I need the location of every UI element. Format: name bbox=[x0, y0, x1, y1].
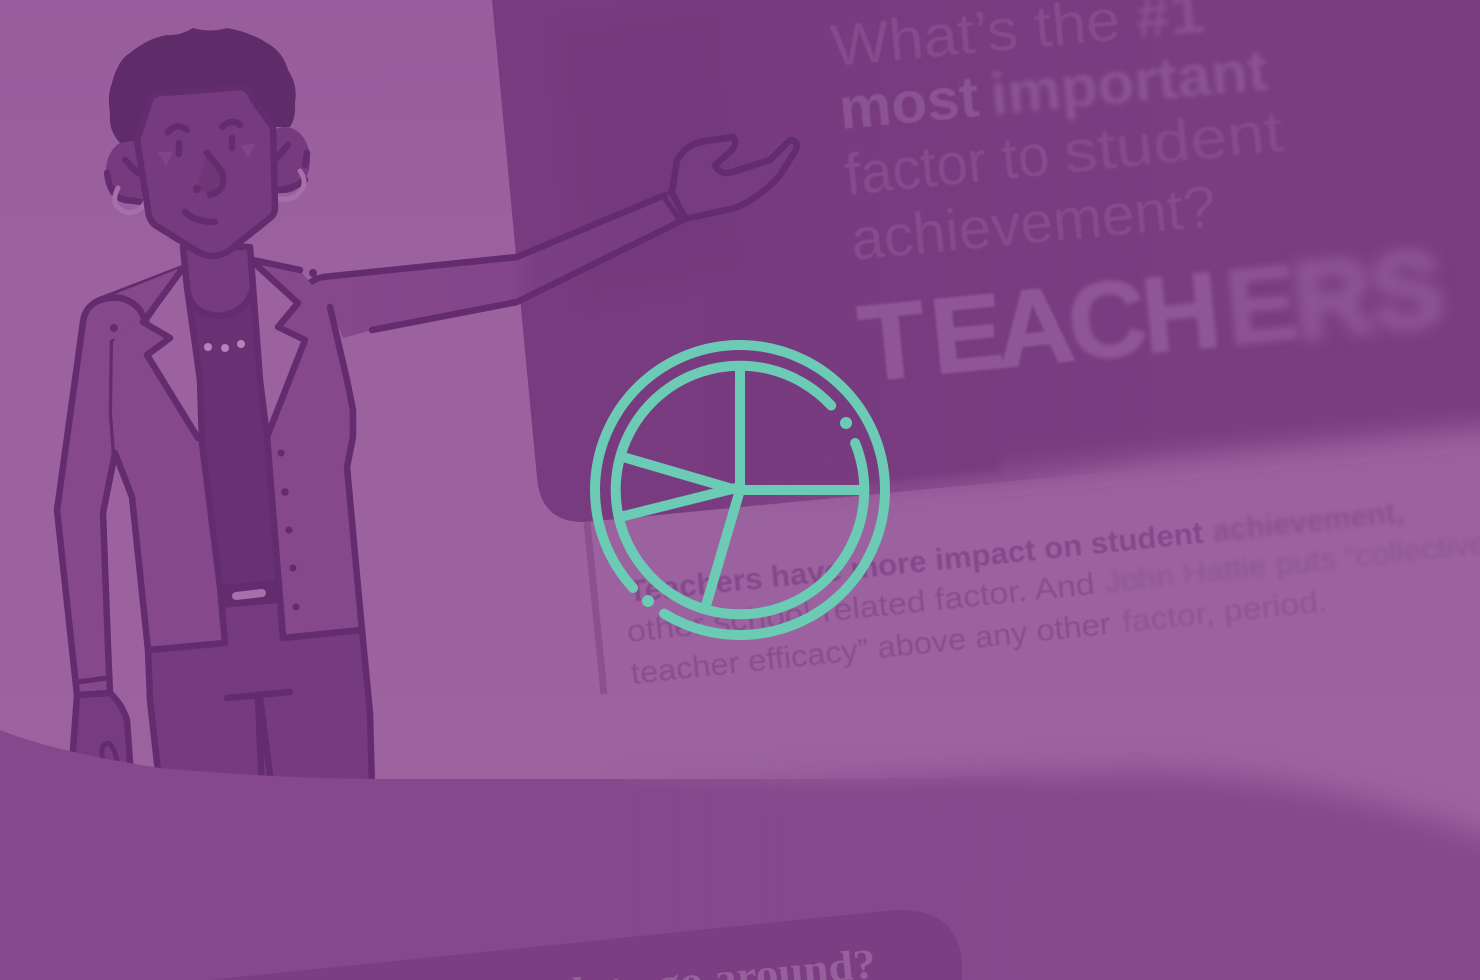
extended arm bbox=[303, 195, 683, 338]
jacket left front bbox=[100, 267, 225, 650]
left lapel outline bbox=[100, 268, 198, 438]
line 1 bbox=[626, 494, 1406, 609]
slide answer: TEACHERS bbox=[853, 226, 1448, 404]
line: most important: important bbox=[988, 38, 1270, 128]
belt bbox=[220, 580, 279, 608]
left sleeve bbox=[57, 268, 183, 695]
hair bbox=[109, 28, 296, 143]
shoulder marks bbox=[110, 269, 317, 332]
line: most important: most bbox=[836, 64, 982, 142]
trousers bbox=[148, 595, 372, 790]
slide answer: TEACHERS: RS bbox=[1288, 226, 1448, 361]
earring left bbox=[115, 188, 146, 213]
trouser fly bbox=[227, 692, 290, 790]
inner ring bbox=[578, 328, 902, 652]
line 2: John Hattie puts “collective bbox=[1103, 525, 1480, 600]
necklace bbox=[204, 340, 245, 352]
line 2 bbox=[625, 525, 1480, 649]
line 1: achievement, bbox=[1211, 494, 1406, 549]
nose bbox=[197, 153, 223, 195]
line: most important bbox=[836, 38, 1270, 142]
line: achievement?: achievement? bbox=[848, 174, 1219, 273]
pie spokes bbox=[620, 365, 865, 609]
jacket right front bbox=[253, 262, 362, 638]
character: presenter bbox=[57, 28, 797, 790]
ear left bbox=[106, 140, 154, 202]
lower panel card bbox=[130, 910, 962, 980]
face bbox=[137, 87, 275, 256]
outer ring bbox=[535, 285, 945, 695]
belt buckle bbox=[236, 593, 262, 596]
wrist cuff bbox=[663, 192, 686, 222]
left hand bbox=[73, 693, 132, 790]
jacket hem and seam bbox=[115, 453, 225, 650]
line 1: Teachers have more impact on student bbox=[626, 515, 1205, 609]
line: factor to student: factor to bbox=[842, 123, 1052, 208]
line 3: factor, period. bbox=[1120, 583, 1329, 639]
wrist band bbox=[78, 678, 108, 695]
vertical rule beside body text bbox=[587, 522, 604, 694]
line 2: other school-related factor. And bbox=[625, 566, 1096, 649]
shirt edges bbox=[187, 287, 283, 643]
slide answer: TEACHERS: TEA bbox=[853, 262, 1079, 404]
shirt bbox=[187, 287, 277, 587]
slide question text bbox=[828, 0, 1286, 273]
line 3 bbox=[629, 583, 1329, 691]
accent dots bbox=[642, 417, 852, 607]
line 3: teacher efficacy” above any other bbox=[629, 606, 1112, 691]
slide answer: TEACHERS: CH bbox=[1062, 248, 1226, 383]
earring right bbox=[276, 171, 304, 199]
icon: pie chart in double ring bbox=[535, 285, 945, 695]
jacket buttons bbox=[278, 450, 300, 610]
slide answer: TEACHERS: E bbox=[1220, 241, 1303, 368]
brows and eyes bbox=[168, 122, 240, 154]
cheeks bbox=[158, 144, 255, 166]
neck bbox=[183, 247, 253, 316]
line: factor to student: student bbox=[1061, 99, 1286, 186]
body text paragraph bbox=[625, 494, 1480, 691]
thumb bbox=[102, 743, 117, 760]
line: factor to student bbox=[842, 99, 1286, 208]
hand bbox=[672, 137, 797, 219]
bottom band bbox=[0, 730, 1480, 980]
ear right bbox=[260, 127, 310, 193]
panel: blurred slide screen bbox=[492, 0, 1480, 522]
mouth bbox=[185, 212, 215, 222]
